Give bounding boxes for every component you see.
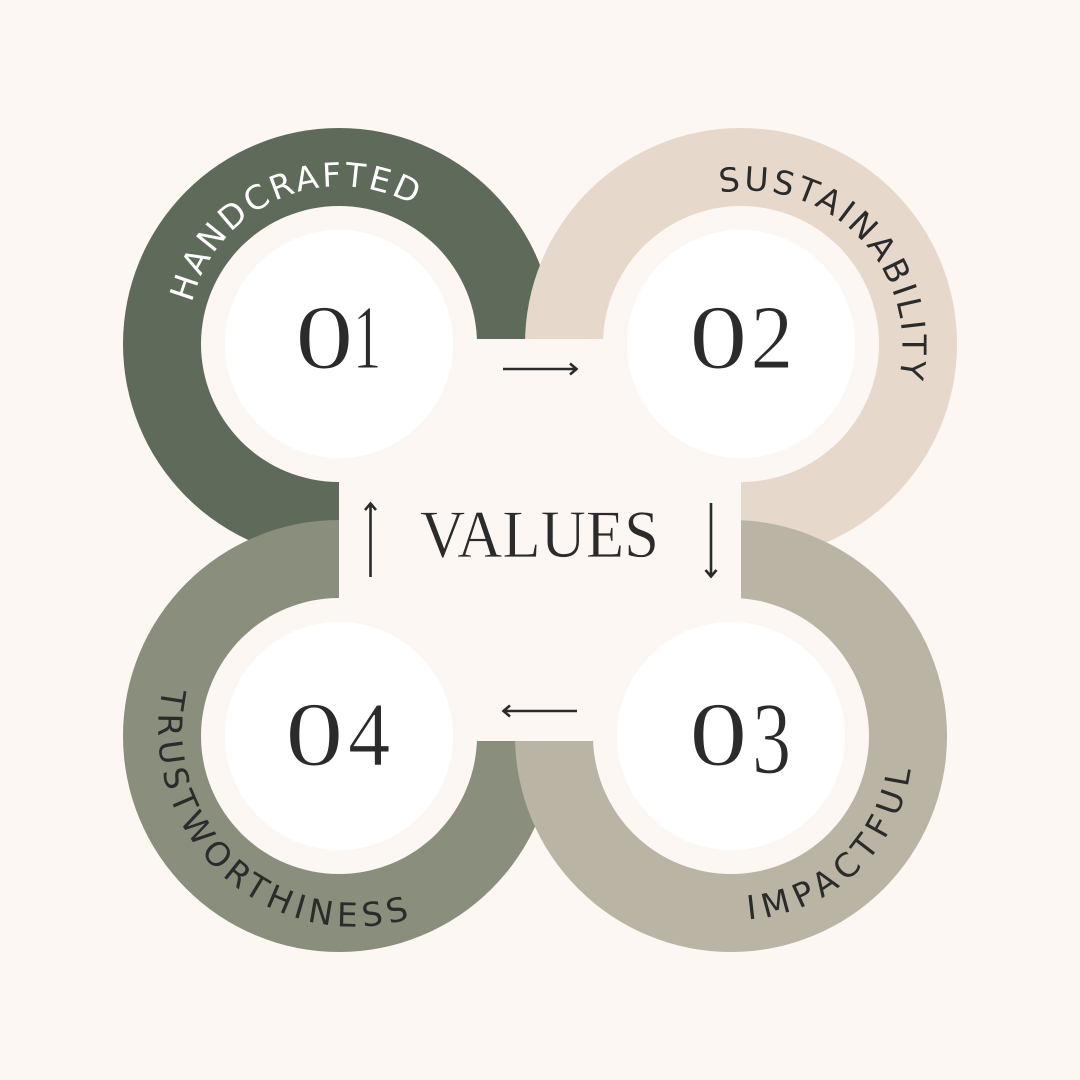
circle 01 (201, 206, 477, 482)
number 04 (285, 684, 390, 786)
arrow right (503, 364, 577, 374)
circle 03 (593, 598, 869, 874)
arrow up (365, 503, 376, 577)
number 03: 0 (689, 684, 748, 785)
circle 02 (603, 206, 879, 482)
number 04: 4 (348, 685, 390, 786)
central background panel (339, 339, 741, 741)
label impactful: IMPACTFUL (748, 769, 911, 920)
label trustworthiness: TRUSTWORTHINESS (158, 691, 407, 927)
label handcrafted: HANDCRAFTED (170, 162, 418, 300)
number 02 (689, 287, 793, 389)
title values: VALUES (420, 496, 659, 572)
ring 01 (123, 128, 555, 560)
label sustainability: SUSTAINABILITY (720, 166, 927, 382)
arrow left (503, 706, 577, 716)
number 01 (295, 287, 381, 388)
number 01: 1 (353, 289, 381, 388)
number 03: 3 (752, 682, 791, 796)
number 03 (689, 682, 791, 796)
ring 02 (525, 128, 957, 560)
number 02: 2 (750, 288, 793, 389)
ring 04 (123, 520, 555, 952)
circle 04 (201, 598, 477, 874)
number 01: 0 (295, 287, 354, 388)
ring 03 (515, 520, 947, 952)
arrow down (706, 503, 716, 577)
number 02: 0 (689, 287, 748, 388)
number 04: 0 (285, 684, 344, 785)
